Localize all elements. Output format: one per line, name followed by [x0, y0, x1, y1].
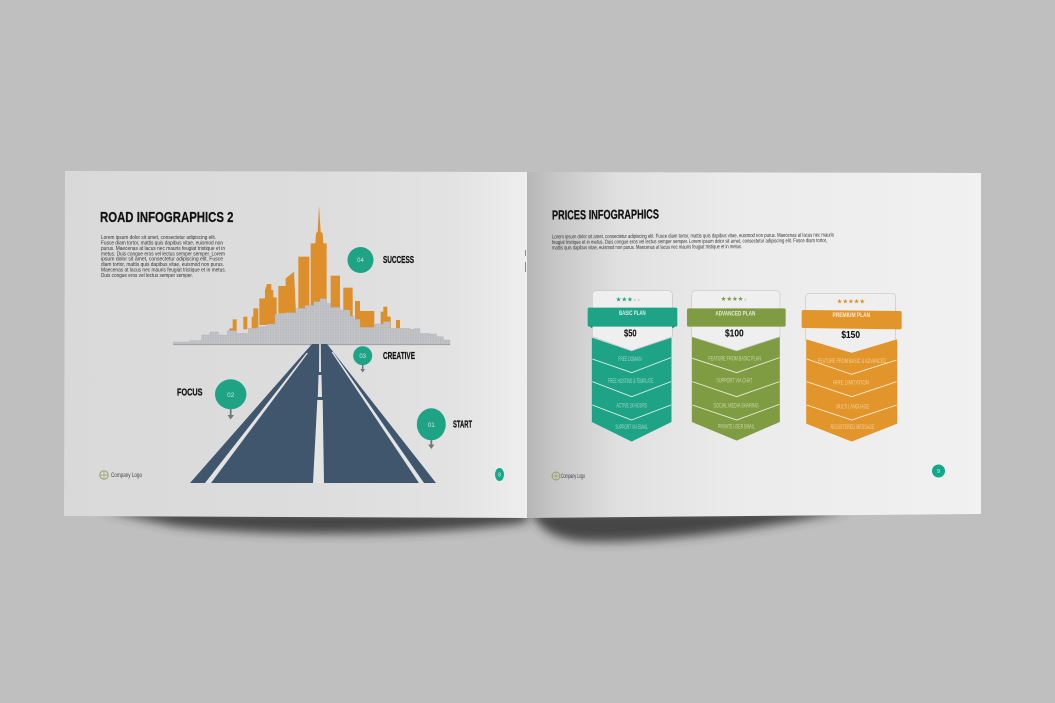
tab box: [692, 291, 780, 351]
features: FREE HOSTING & TEMPLATE: [608, 379, 653, 385]
text block: road intro: Maecenas at lacus nec mauris feugiat tristique et in metus.: [101, 267, 226, 273]
text block: prices intro: mattis quis dapibus vitae, euismod non purus. Maecenas at lacus nec mauris feugiat tristique et in metus.: [552, 244, 742, 251]
text block: road intro: purus. Maecenas at lacus nec mauris feugiat tristique et in: [101, 246, 225, 252]
stars: ★★★★★: [837, 299, 865, 306]
features: MULTI LANGUAGE: [836, 405, 869, 411]
marker: 02 focus: FOCUS: [177, 386, 202, 398]
stars: ★★★★★: [721, 296, 747, 303]
chart: road: [190, 344, 436, 483]
centre dashes: [319, 344, 321, 372]
marker: 04 success: 04: [357, 258, 364, 264]
grey city mass: [173, 299, 450, 345]
chevrons: [592, 358, 671, 420]
marker: 03 creative: CREATIVE: [383, 350, 415, 362]
marker: 03 creative: [353, 346, 415, 372]
chevrons: [807, 359, 897, 420]
marker: 01 start: START: [453, 418, 472, 430]
band: [588, 308, 677, 327]
body: [692, 338, 779, 440]
logo: left page: Company Logo: [111, 473, 142, 479]
marker: 04 success: SUCCESS: [383, 254, 414, 266]
stars: ★★★★★: [616, 297, 641, 304]
page number: left: 8: [498, 472, 501, 478]
features: [608, 357, 653, 431]
orange towers: [229, 205, 400, 332]
features: REGISTERED MESSAGE: [831, 425, 875, 431]
tab box: [592, 291, 672, 351]
card: premium plan: [802, 293, 902, 441]
card: basic plan: [588, 291, 677, 441]
page number: right: 9: [937, 469, 940, 475]
shadow under left page: [100, 510, 527, 534]
page number: right: [932, 464, 945, 478]
text block: prices intro: Lorem ipsum dolor sit amet, consectetur adipiscing elit. Fusce diam tortor, mattis quis dapibus vitae, euismod non purus. Maecenas at lacus nec mauris: [552, 233, 834, 240]
text block: road intro: Lorem ipsum dolor sit amet, consectetur adipiscing elit.: [101, 235, 216, 241]
band fold: [588, 325, 677, 328]
text block: prices intro: feugiat tristique et in metus. Duis congue eros vel lectus semper semper. Lorem ipsum dolor sit amet, consectetur adipiscing elit. Fusce diam tortor,: [552, 238, 827, 246]
marker: 03 creative: 03: [359, 354, 367, 360]
text block: road intro: ipsum dolor sit amet, consectetur adipiscing elit. Fusce: [101, 257, 223, 263]
chevrons: [692, 358, 779, 420]
plan name: BASIC PLAN: [619, 310, 646, 317]
band: [802, 310, 902, 329]
plan name: PREMIUM PLAN: [832, 312, 870, 319]
logo: left page: [100, 470, 142, 480]
features: SOCIAL MEDIA SHARING: [713, 403, 759, 409]
body: [807, 340, 897, 441]
features: FREE DOMAIN: [618, 357, 642, 363]
left road edge stripe: [205, 353, 308, 483]
features: HIRE LIMITATION: [833, 380, 869, 386]
panel: left page: [64, 171, 527, 518]
band: [687, 308, 786, 327]
right road edge stripe: [332, 352, 424, 483]
features: FEATURE FROM BASIC PLAN: [708, 357, 761, 363]
panel: right page: [526, 172, 981, 518]
marker: 02 focus: 02: [227, 392, 235, 399]
card: advanced plan: [687, 291, 786, 440]
body: [592, 338, 671, 441]
features: ACTIVE 24 HOURS: [616, 404, 647, 410]
plan name: ADVANCED PLAN: [715, 310, 755, 317]
features: [708, 357, 761, 431]
features: [818, 359, 887, 431]
logo: right page: [552, 472, 585, 480]
tab box: [806, 293, 896, 353]
text block: road intro: metus. Duis congue eros vel lectus semper semper. Lorem: [101, 251, 225, 257]
text block: prices intro: [552, 233, 834, 251]
price: $100: [725, 328, 744, 339]
text block: road intro: [101, 235, 226, 279]
marker: 02 focus: [177, 379, 246, 420]
heading: road infographics: ROAD INFOGRAPHICS 2: [100, 209, 234, 226]
chart: city skyline: [173, 205, 450, 345]
price: $50: [624, 329, 637, 340]
heading: prices infographics: PRICES INFOGRAPHICS: [552, 206, 659, 222]
price: $150: [841, 330, 860, 341]
features: FEATURE FROM BASIC & ADVANCED: [818, 359, 887, 365]
features: PRIVATE USER EMAIL: [718, 425, 755, 431]
features: SUPPORT VIA CHAT: [716, 379, 753, 385]
shadow under right page: [530, 510, 850, 542]
text block: road intro: Fusce diam tortor, mattis quis dapibus vitae, euismod non: [101, 240, 223, 246]
marker: 01 start: [417, 408, 472, 449]
text block: road intro: diam tortor, mattis quis dapibus vitae, euismod non purus.: [101, 262, 224, 268]
text block: road intro: Duis congue eros vel lectus semper semper.: [101, 273, 193, 279]
page number: left: [495, 468, 504, 481]
features: SUPPORT VIA EMAIL: [615, 425, 648, 431]
marker: 01 start: 01: [428, 422, 435, 429]
logo: right page: Company Logo: [561, 474, 585, 480]
marker: 04 success: [348, 247, 414, 273]
